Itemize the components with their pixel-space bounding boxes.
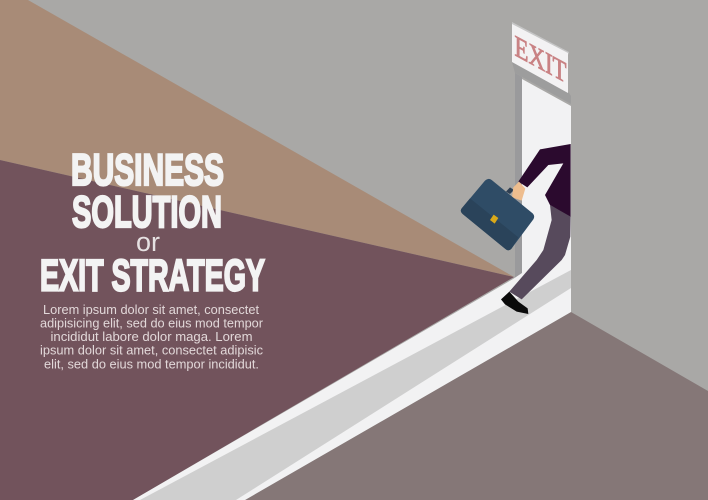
title line: business: BUSINESS xyxy=(71,146,224,195)
tan light wedge xyxy=(0,0,514,277)
paragraph line 1: Lorem ipsum dolor sit amet, consectet xyxy=(43,302,259,317)
paragraph line 5: elit, sed do eius mod tempor incididut. xyxy=(44,356,259,372)
briefcase lower flap xyxy=(461,198,518,250)
body paragraph xyxy=(40,302,264,372)
running businessman xyxy=(461,144,571,314)
briefcase body xyxy=(461,179,534,250)
briefcase xyxy=(461,179,534,250)
jacket and sleeve xyxy=(518,144,571,217)
sign text: EXIT xyxy=(514,28,567,90)
briefcase handle xyxy=(506,187,514,194)
open door and light strip xyxy=(133,79,571,500)
title line: exit strategy: EXIT STRATEGY xyxy=(40,252,265,300)
title connector: or: or xyxy=(136,227,160,257)
sign face xyxy=(512,24,568,93)
title xyxy=(40,146,265,300)
title line: solution: SOLUTION xyxy=(72,188,222,237)
paragraph line 3: incididut labore dolor maga. Lorem xyxy=(50,329,252,344)
taupe floor xyxy=(245,312,708,500)
exit sign xyxy=(512,22,571,104)
grey strip on the light path xyxy=(140,270,571,500)
shoe xyxy=(501,292,528,314)
briefcase clasp xyxy=(490,215,498,224)
hand xyxy=(512,182,525,201)
trousers xyxy=(509,205,571,299)
maroon floor xyxy=(0,160,514,500)
sign top edge xyxy=(512,22,569,55)
door frame xyxy=(515,73,522,278)
paragraph line 4: ipsum dolor sit amet, consectet adipisic xyxy=(40,342,263,358)
paragraph line 2: adipisicing elit, sed do eius mod tempor xyxy=(40,316,264,330)
sign shadow xyxy=(512,62,571,104)
